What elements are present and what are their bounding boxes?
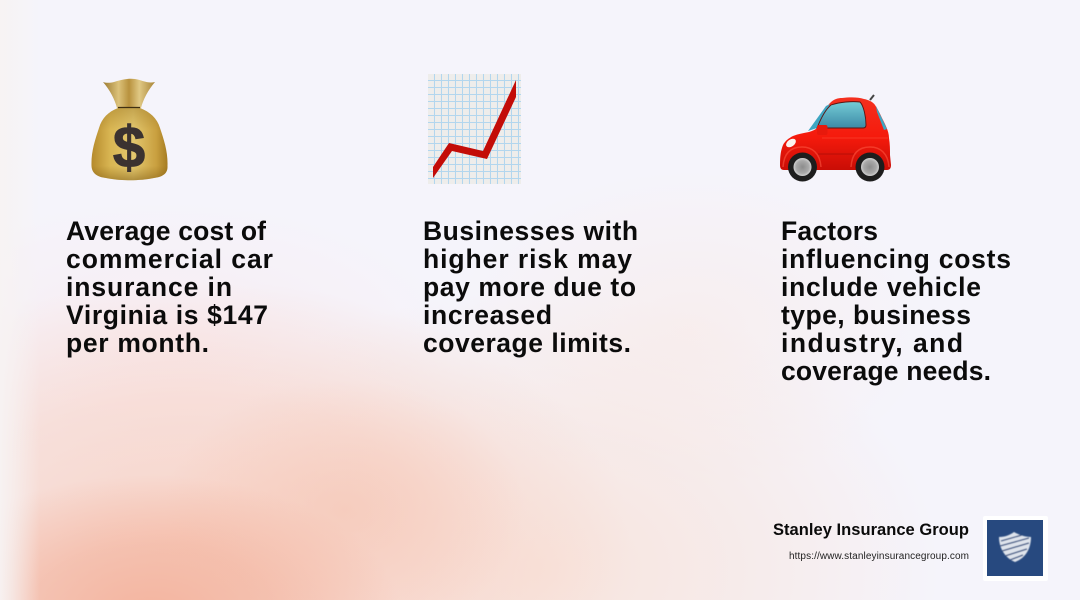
text block: average cost [66, 216, 273, 358]
text block: average cost: Average cost of [66, 216, 266, 246]
text block: higher risk [423, 216, 638, 358]
text block: cost factors: coverage needs. [781, 356, 991, 386]
text block: higher risk: coverage limits. [423, 328, 631, 358]
text block: higher risk: increased [423, 300, 552, 330]
text block: cost factors: Factors [781, 216, 878, 246]
text block: higher risk: higher risk may [423, 244, 632, 274]
icon: money bag [91, 79, 168, 180]
icon: rising chart [428, 74, 521, 184]
text block: higher risk: Businesses with [423, 216, 638, 246]
text block: cost factors [781, 216, 1011, 386]
text block: average cost: per month. [66, 328, 209, 358]
text block: average cost: commercial car [66, 244, 273, 274]
icon: red car [780, 95, 891, 182]
text block: average cost: insurance in [66, 272, 232, 302]
logo: shield badge [983, 516, 1048, 581]
text block: cost factors: include vehicle [781, 272, 981, 302]
text block: cost factors: influencing costs [781, 244, 1011, 274]
icon: dollar sign: $ [113, 115, 145, 180]
text block: higher risk: pay more due to [423, 272, 636, 302]
company name: Stanley Insurance Group [773, 521, 969, 539]
company url: https://www.stanleyinsurancegroup.com [789, 551, 969, 562]
text block: average cost: Virginia is $147 [66, 300, 268, 330]
text block: cost factors: type, business [781, 300, 971, 330]
text block: cost factors: industry, and [781, 328, 963, 358]
